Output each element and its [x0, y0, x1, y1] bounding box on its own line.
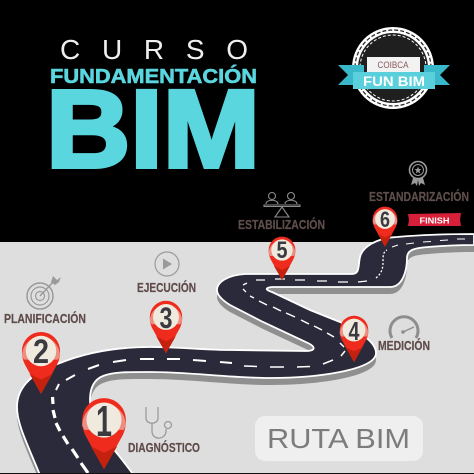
pin 4: 4	[348, 316, 360, 346]
pin 3	[150, 301, 182, 353]
title: BIM: BIM	[46, 68, 260, 191]
pin 6: 6	[380, 207, 390, 232]
road	[17, 234, 474, 474]
pin 1	[82, 397, 126, 469]
banner: finish: FINISH	[420, 216, 450, 226]
pin 1: 1	[96, 397, 112, 446]
button: ruta bim: RUTA BIM	[267, 423, 410, 454]
icon: play	[155, 252, 179, 276]
label: medición: MEDICIÓN	[378, 338, 430, 353]
button: ruta bim	[255, 416, 423, 461]
pin 3: 3	[160, 302, 172, 335]
background: gray bottom	[0, 242, 474, 474]
logo: fun bim badge	[338, 27, 450, 109]
label: ejecución: EJECUCIÓN	[137, 280, 196, 295]
background: black top	[0, 0, 474, 242]
title: curso: CURSO	[60, 34, 248, 65]
logo: fun bim badge: FUN BIM	[363, 73, 425, 89]
pin 2	[22, 332, 60, 394]
title: fundamentación: FUNDAMENTACIÓN	[50, 64, 257, 88]
banner: finish	[408, 213, 461, 226]
pin 6	[373, 207, 397, 247]
label: estabilización: ESTABILIZACIÓN	[238, 217, 325, 232]
icon: gauge	[390, 317, 418, 338]
icon: balance	[264, 192, 300, 217]
label: diagnóstico: DIAGNÓSTICO	[128, 440, 200, 455]
icon: stethoscope	[146, 407, 172, 438]
bottom edge line	[0, 473, 474, 474]
pin 4	[340, 316, 368, 362]
label: planificación: PLANIFICACIÓN	[4, 311, 86, 326]
icon: target	[27, 276, 61, 309]
pin 5	[269, 237, 295, 280]
pin 2: 2	[33, 333, 49, 371]
icon: medal	[410, 162, 426, 186]
pin 5: 5	[276, 237, 288, 264]
logo: fun bim badge: COIBCA	[378, 60, 408, 70]
